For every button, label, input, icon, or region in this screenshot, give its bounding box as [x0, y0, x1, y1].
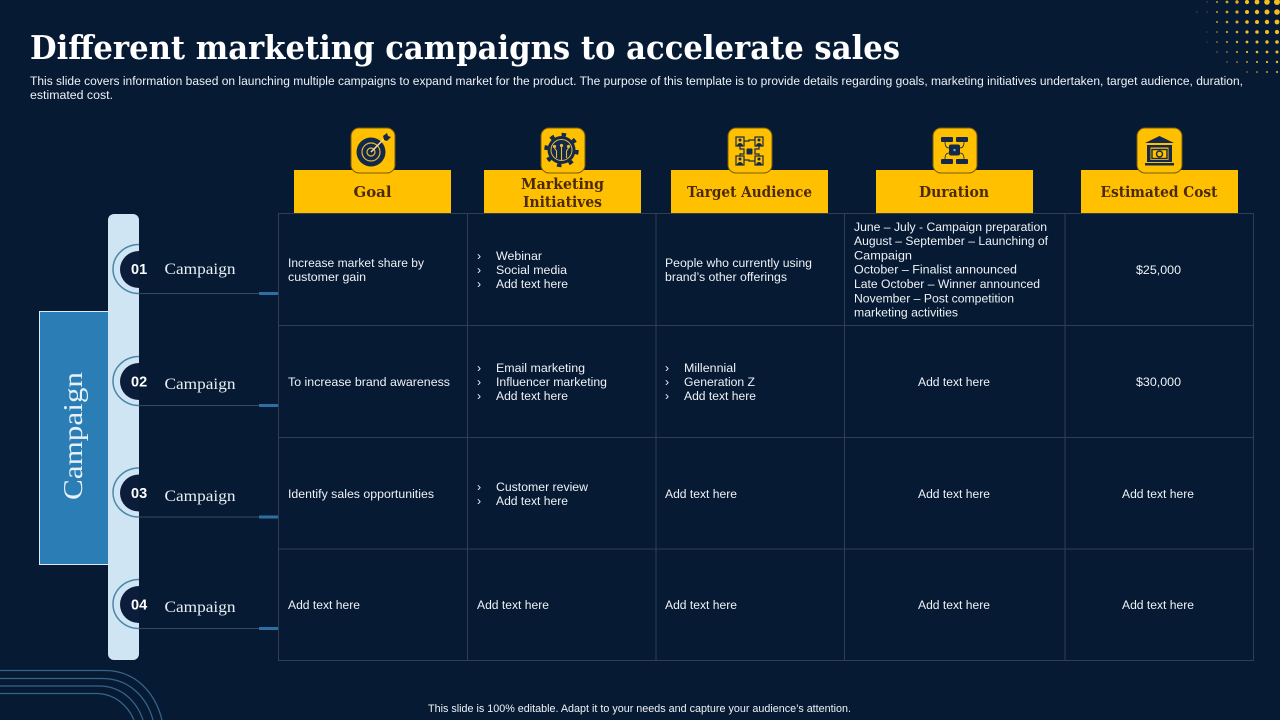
row 4 cells: Add text here	[288, 598, 360, 612]
row marker 01	[113, 244, 278, 295]
row 2 cells: Generation Z	[684, 375, 755, 389]
row 3 cells: Add text here	[1122, 487, 1194, 501]
row 1 cells: Increase market share by	[288, 256, 425, 270]
row marker 02: Campaign	[164, 376, 236, 393]
vertical bar	[108, 214, 139, 660]
row 1 cells: ›	[477, 277, 481, 291]
row 2 cells: ›	[477, 389, 481, 403]
row 1 cells: ›	[477, 263, 481, 277]
row marker 01: Campaign	[164, 261, 236, 278]
row 1 cells: marketing activities	[854, 306, 958, 320]
description text: estimated cost.	[30, 88, 113, 102]
row 3 cells: Identify sales opportunities	[288, 487, 434, 501]
row 1 cells: October – Finalist announced	[854, 262, 1017, 276]
row 2 cells: ›	[477, 375, 481, 389]
icon: network nodes	[933, 128, 977, 173]
header: Marketing Initiatives: Initiatives	[523, 194, 602, 211]
row 3 cells	[288, 480, 1194, 508]
decorative corner curves	[0, 670, 162, 720]
row 1 cells: August – September – Launching of	[854, 234, 1049, 248]
row 1 cells: ›	[477, 249, 481, 263]
header: Duration	[876, 128, 1033, 213]
panel: campaign side label: Campaign	[58, 371, 88, 500]
row marker 01: 01	[131, 262, 147, 278]
row 2 cells: Add text here	[918, 375, 990, 389]
header: Target Audience	[671, 128, 828, 213]
row 1 cells: June – July - Campaign preparation	[854, 220, 1047, 234]
row marker 03	[113, 468, 278, 518]
row 2 cells: ›	[665, 375, 669, 389]
row 3 cells: Add text here	[918, 487, 990, 501]
row marker 04: Campaign	[164, 599, 236, 616]
row marker 03: Campaign	[164, 488, 236, 505]
row 1 cells: Webinar	[496, 249, 542, 263]
header: Estimated Cost	[1081, 128, 1238, 213]
row 4 cells: Add text here	[477, 598, 549, 612]
row 2 cells: Email marketing	[496, 361, 585, 375]
header: Marketing Initiatives: Marketing	[521, 176, 604, 193]
row 2 cells: Add text here	[684, 389, 756, 403]
icon: target	[351, 128, 395, 173]
row 3 cells: ›	[477, 480, 481, 494]
header: Target Audience: Target Audience	[687, 184, 812, 201]
row 1 cells: People who currently using	[665, 256, 812, 270]
row 1 cells: customer gain	[288, 270, 366, 284]
row 4 cells	[288, 598, 1194, 612]
row marker 04	[113, 580, 278, 630]
row 1 cells: Social media	[496, 263, 567, 277]
row 3 cells: ›	[477, 494, 481, 508]
header: Estimated Cost: Estimated Cost	[1100, 184, 1218, 201]
row 1 cells: Campaign	[854, 248, 912, 262]
row 1 cells	[288, 220, 1181, 320]
row marker 03: 03	[131, 486, 147, 502]
header: Marketing Initiatives	[484, 128, 641, 213]
row marker 04: 04	[131, 598, 147, 614]
row 3 cells: Add text here	[665, 487, 737, 501]
row 4 cells: Add text here	[1122, 598, 1194, 612]
row 1 cells: Late October – Winner announced	[854, 277, 1040, 291]
row 2 cells	[288, 361, 1181, 403]
description text	[30, 74, 1243, 102]
title: Different marketing campaigns to accelerate sales	[30, 28, 900, 67]
row 2 cells: ›	[665, 361, 669, 375]
icon: connected people	[728, 128, 772, 173]
row 4 cells: Add text here	[918, 598, 990, 612]
row 1 cells: $25,000	[1136, 263, 1181, 277]
header: Duration: Duration	[919, 184, 989, 201]
row 1 cells: brand’s other offerings	[665, 270, 787, 284]
row 2 cells: To increase brand awareness	[288, 375, 450, 389]
row 2 cells: Add text here	[496, 389, 568, 403]
header: Goal: Goal	[354, 184, 392, 201]
icon: gear circuit	[541, 128, 585, 173]
row 2 cells: $30,000	[1136, 375, 1181, 389]
footer note: This slide is 100% editable. Adapt it to your needs and capture your audience’s attention.	[428, 703, 851, 715]
row 2 cells: ›	[477, 361, 481, 375]
row 3 cells: Add text here	[496, 494, 568, 508]
row marker 02: 02	[131, 374, 147, 390]
panel: campaign side label	[40, 312, 108, 564]
header: Goal	[294, 128, 451, 213]
table grid	[278, 214, 1254, 660]
row 2 cells: Millennial	[684, 361, 736, 375]
row 1 cells: Add text here	[496, 277, 568, 291]
row 1 cells: November – Post competition	[854, 292, 1014, 306]
row 2 cells: ›	[665, 389, 669, 403]
row 4 cells: Add text here	[665, 598, 737, 612]
row 2 cells: Influencer marketing	[496, 375, 607, 389]
row marker 02	[113, 356, 278, 407]
row 3 cells: Customer review	[496, 480, 588, 494]
icon: bank building	[1137, 128, 1182, 173]
description text: This slide covers information based on launching multiple campaigns to expand market for the product. The purpose of this template is to provide details regarding goals, marketing initiatives undertaken, target audience, duration,	[30, 74, 1243, 88]
decorative dot pattern	[1196, 0, 1280, 73]
